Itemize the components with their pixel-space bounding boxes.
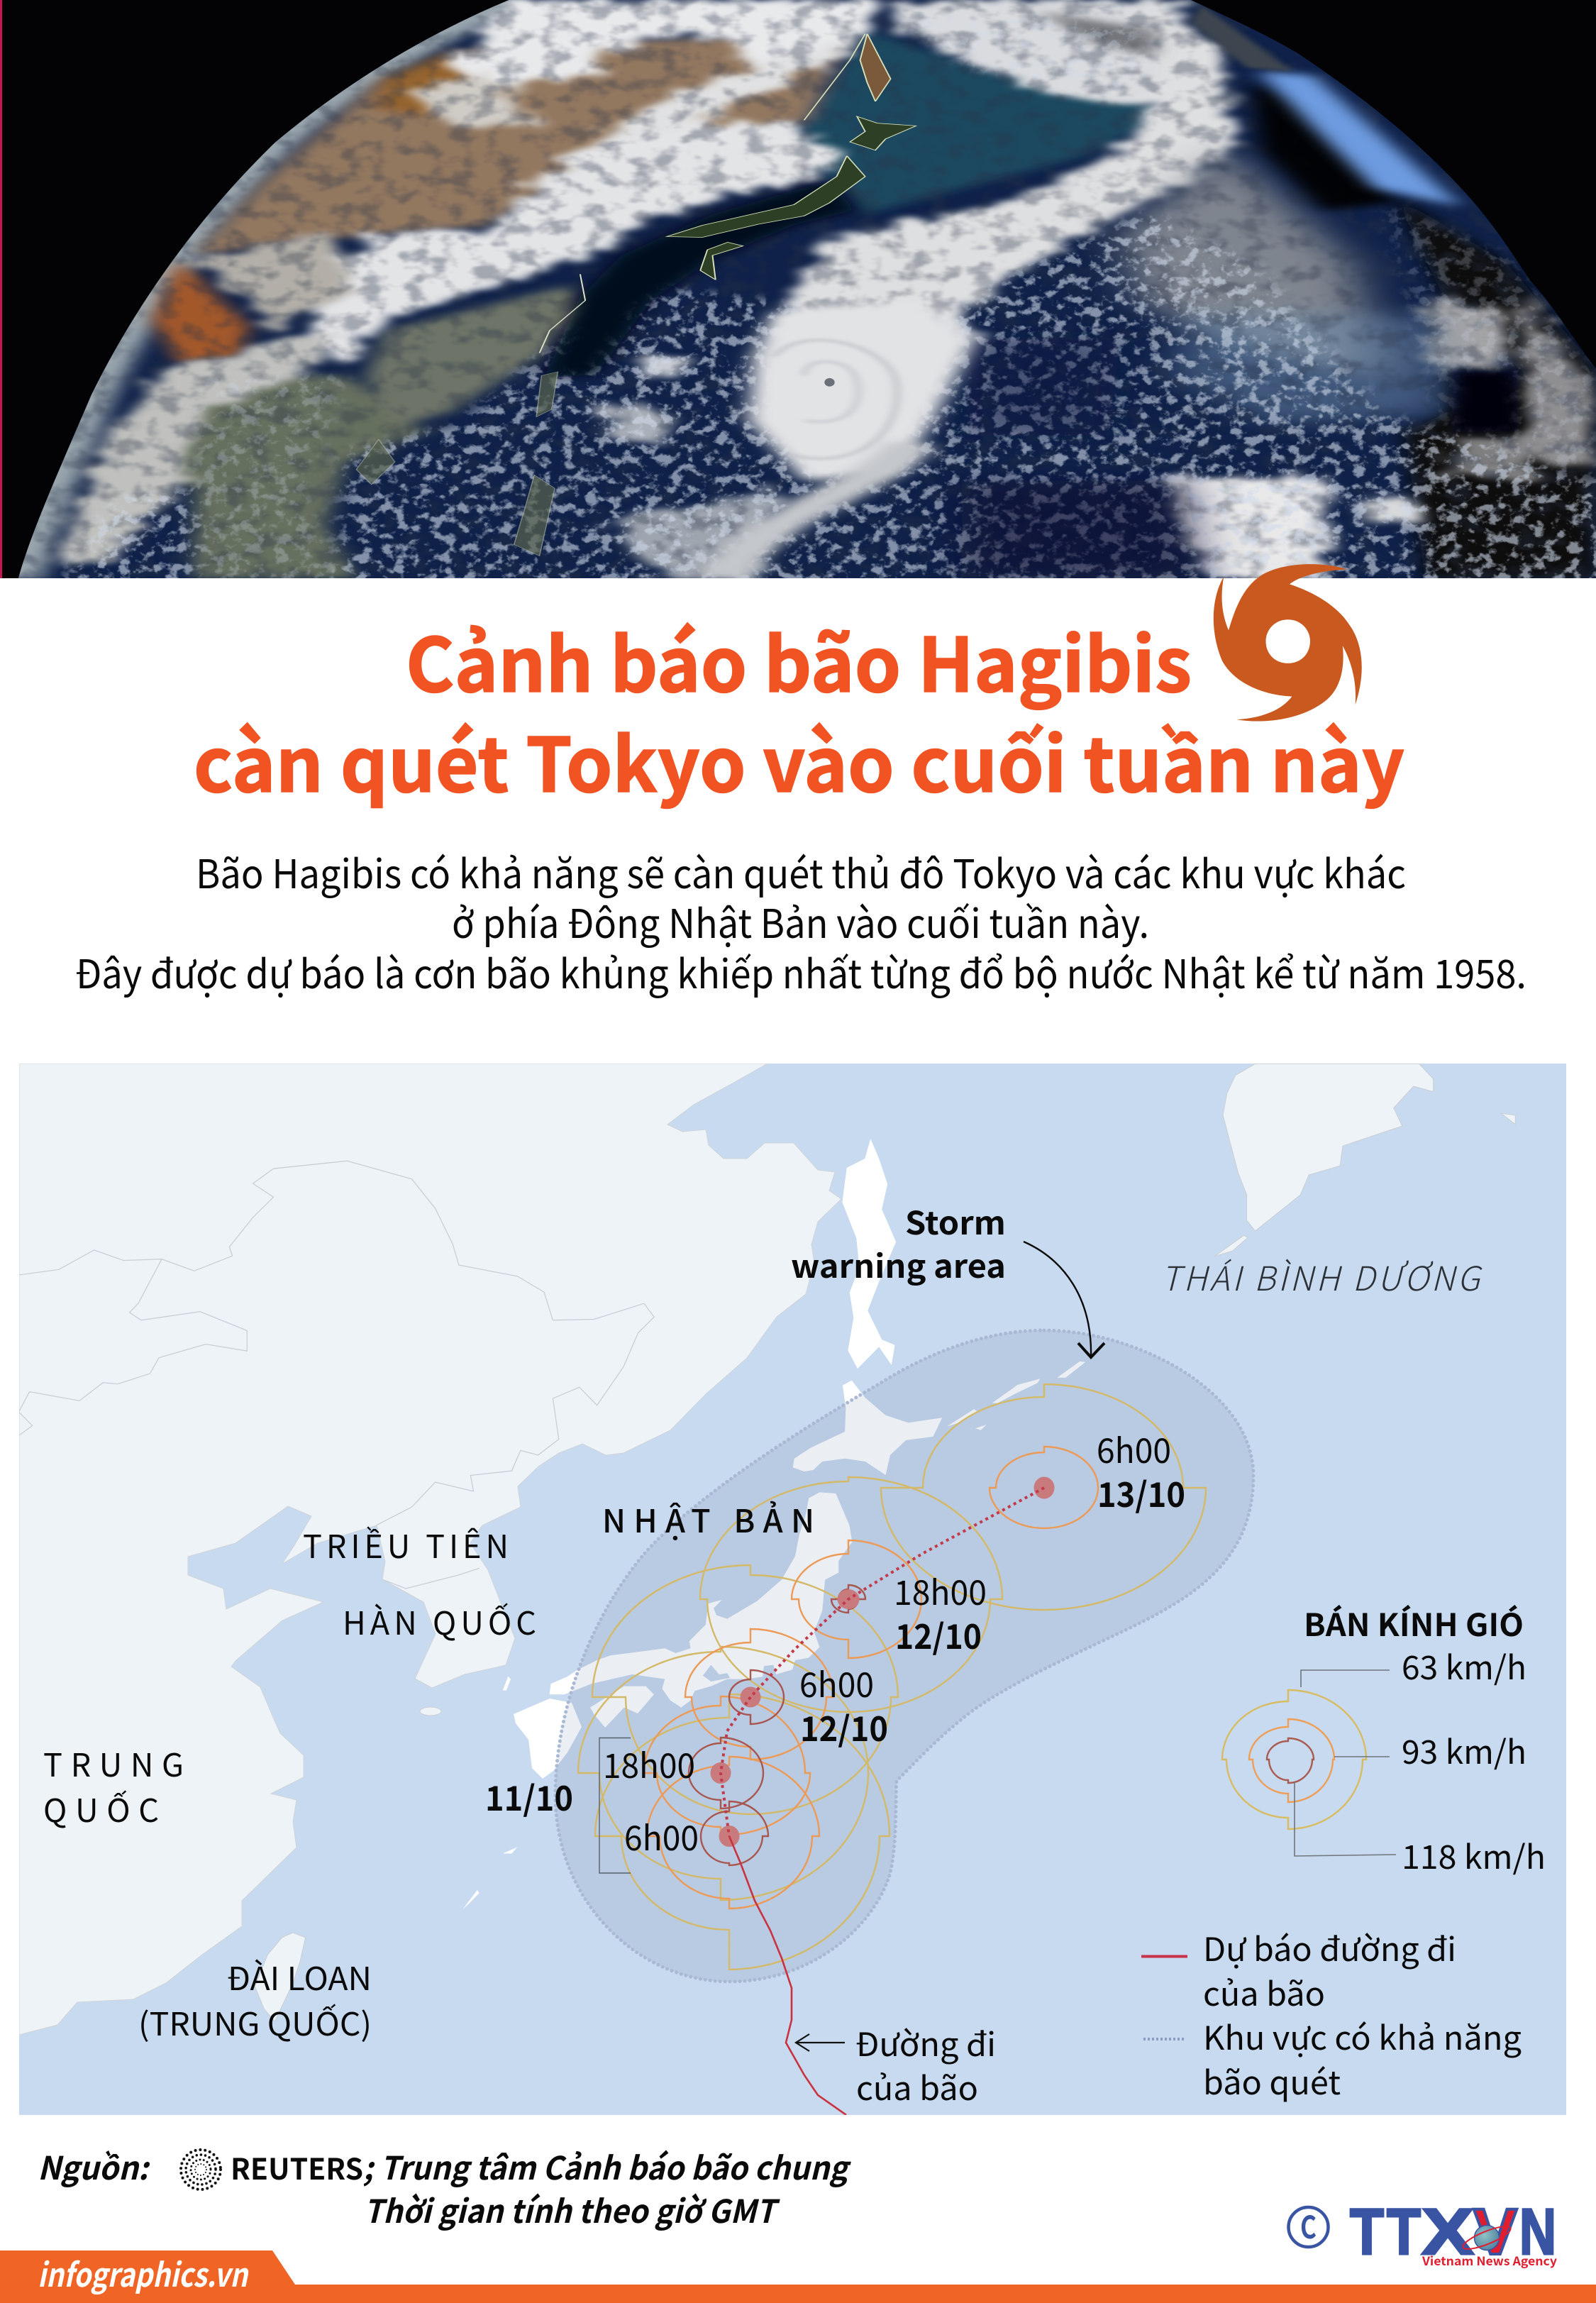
TTXVN logo: X xyxy=(1422,2196,1474,2268)
title: Cảnh báo bão Hagibis xyxy=(406,606,1192,714)
satellite photo of typhoon Hagibis over East Asia xyxy=(0,0,1596,578)
wind speed values: 63 km/h xyxy=(1402,1642,1526,1689)
intro paragraph: Bão Hagibis có khả năng sẽ càn quét thủ đô Tokyo và các khu vực khác xyxy=(196,843,1406,900)
legend rings xyxy=(1222,1690,1366,1829)
Kamchatka and northern islands xyxy=(1214,1064,1515,1257)
time labels: 18h00 xyxy=(894,1565,987,1615)
label: Japan: NHẬT BẢN xyxy=(602,1496,814,1542)
Japan islands xyxy=(463,1362,1085,1909)
forecast track dotted xyxy=(721,1488,1044,1836)
panel: storm track map xyxy=(19,1064,1566,2115)
bracket for 11/10 times xyxy=(599,1738,631,1873)
legend: storm sweep area: bão quét xyxy=(1203,2058,1341,2104)
time labels: 6h00 xyxy=(1097,1423,1171,1473)
typhoon xyxy=(718,300,977,578)
legend: wind radius xyxy=(1222,1600,1546,1879)
callout: storm warning area: warning area xyxy=(791,1241,1006,1287)
source block: Nguồn: xyxy=(38,2143,150,2189)
source block xyxy=(38,2143,851,2232)
country labels: QUỐC xyxy=(43,1785,159,1831)
curved arrow to warning area xyxy=(1024,1242,1104,1357)
TTXVN logo: T xyxy=(1350,2196,1384,2268)
past track solid line xyxy=(729,1836,846,2115)
time labels: 11/10 xyxy=(485,1771,573,1821)
country labels: TRIỀU TIÊN xyxy=(303,1521,509,1567)
time labels: 13/10 xyxy=(1097,1467,1185,1517)
icon: Reuters dot globe xyxy=(181,2150,221,2189)
country labels: HÀN QUỐC xyxy=(343,1598,536,1644)
country labels: TRUNG xyxy=(43,1740,184,1786)
callout: storm warning area xyxy=(791,1198,1006,1287)
footer bar with site tab xyxy=(0,2250,1596,2303)
time labels: 6h00 xyxy=(624,1811,699,1860)
source block: ; Trung tâm Cảnh báo bão chung xyxy=(363,2143,851,2189)
storm position markers xyxy=(711,1477,1054,1847)
time labels: 12/10 xyxy=(895,1609,982,1659)
intro paragraph: Đây được dự báo là cơn bão khủng khiếp nhất từng đổ bộ nước Nhật kể từ năm 1958. xyxy=(75,943,1526,1000)
legend leader lines xyxy=(1295,1670,1396,1856)
time labels: 6h00 xyxy=(799,1657,874,1707)
map sea background xyxy=(19,1064,1566,2115)
Japan and coastlines xyxy=(667,34,916,280)
intro paragraph: ở phía Đông Nhật Bản vào cuối tuần này. xyxy=(452,893,1149,950)
title xyxy=(194,606,1404,814)
callout: storm warning area: Storm xyxy=(905,1198,1006,1244)
TTXVN logo xyxy=(1350,2196,1557,2269)
track label: của bão xyxy=(856,2063,978,2110)
country labels xyxy=(43,1521,536,2045)
title: càn quét Tokyo vào cuối tuần này xyxy=(194,706,1404,814)
legend: wind radius: BÁN KÍNH GIÓ xyxy=(1304,1600,1524,1645)
mottled cloud texture xyxy=(0,0,1596,578)
clouds xyxy=(56,0,1593,578)
copyright mark xyxy=(1288,2202,1328,2248)
dark seas and deep ocean xyxy=(545,180,855,375)
time labels xyxy=(485,1423,1185,1860)
wind radius rings: 93 km/h xyxy=(644,1447,1098,1909)
time labels: 12/10 xyxy=(800,1701,888,1751)
footer bar with site tab: infographics.vn xyxy=(38,2250,249,2297)
TTXVN logo: Vietnam News Agency xyxy=(1422,2251,1557,2269)
country labels: ĐÀI LOAN xyxy=(227,1953,372,1999)
legend: forecast track: của bão xyxy=(1203,1969,1325,2016)
country borders xyxy=(19,1161,654,1589)
country labels: (TRUNG QUỐC) xyxy=(138,1999,372,2045)
source block: Thời gian tính theo giờ GMT xyxy=(364,2186,781,2232)
time labels: 18h00 xyxy=(603,1738,695,1788)
legend: storm sweep area: Khu vực có khả năng xyxy=(1203,2013,1522,2060)
track label xyxy=(855,2019,996,2110)
speckled ocean clouds xyxy=(0,0,1596,578)
source block: REUTERS xyxy=(231,2145,363,2188)
wind radius rings: 118 km/h xyxy=(689,1585,865,1865)
legend: forecast track xyxy=(1141,1924,1456,2016)
TTXVN logo: T xyxy=(1387,2196,1421,2268)
TTXVN logo: N xyxy=(1519,2196,1556,2268)
storm icon xyxy=(1214,564,1362,722)
Inland sea and bays xyxy=(703,1576,757,1681)
storm warning area xyxy=(555,1330,1253,1982)
track label arrow xyxy=(796,2034,845,2051)
wind speed values: 118 km/h xyxy=(1402,1832,1546,1879)
Jeju and Taiwan xyxy=(255,1707,441,2021)
copyright mark: C xyxy=(1300,2202,1317,2248)
legend: storm sweep area xyxy=(1143,2013,1522,2104)
track label: Đường đi xyxy=(855,2019,996,2066)
label: Pacific Ocean: THÁI BÌNH DƯƠNG xyxy=(1161,1252,1483,1300)
legend: forecast track: Dự báo đường đi xyxy=(1203,1924,1456,1971)
intro paragraph xyxy=(75,843,1526,1000)
TTXVN logo: V xyxy=(1473,2196,1517,2268)
wind speed values xyxy=(1402,1642,1546,1879)
mainland Asia land mass xyxy=(19,1064,841,2035)
wind speed values: 93 km/h xyxy=(1402,1727,1526,1774)
wind radius rings: 63 km/h xyxy=(578,1384,1206,1970)
Sakhalin xyxy=(842,1139,896,1369)
